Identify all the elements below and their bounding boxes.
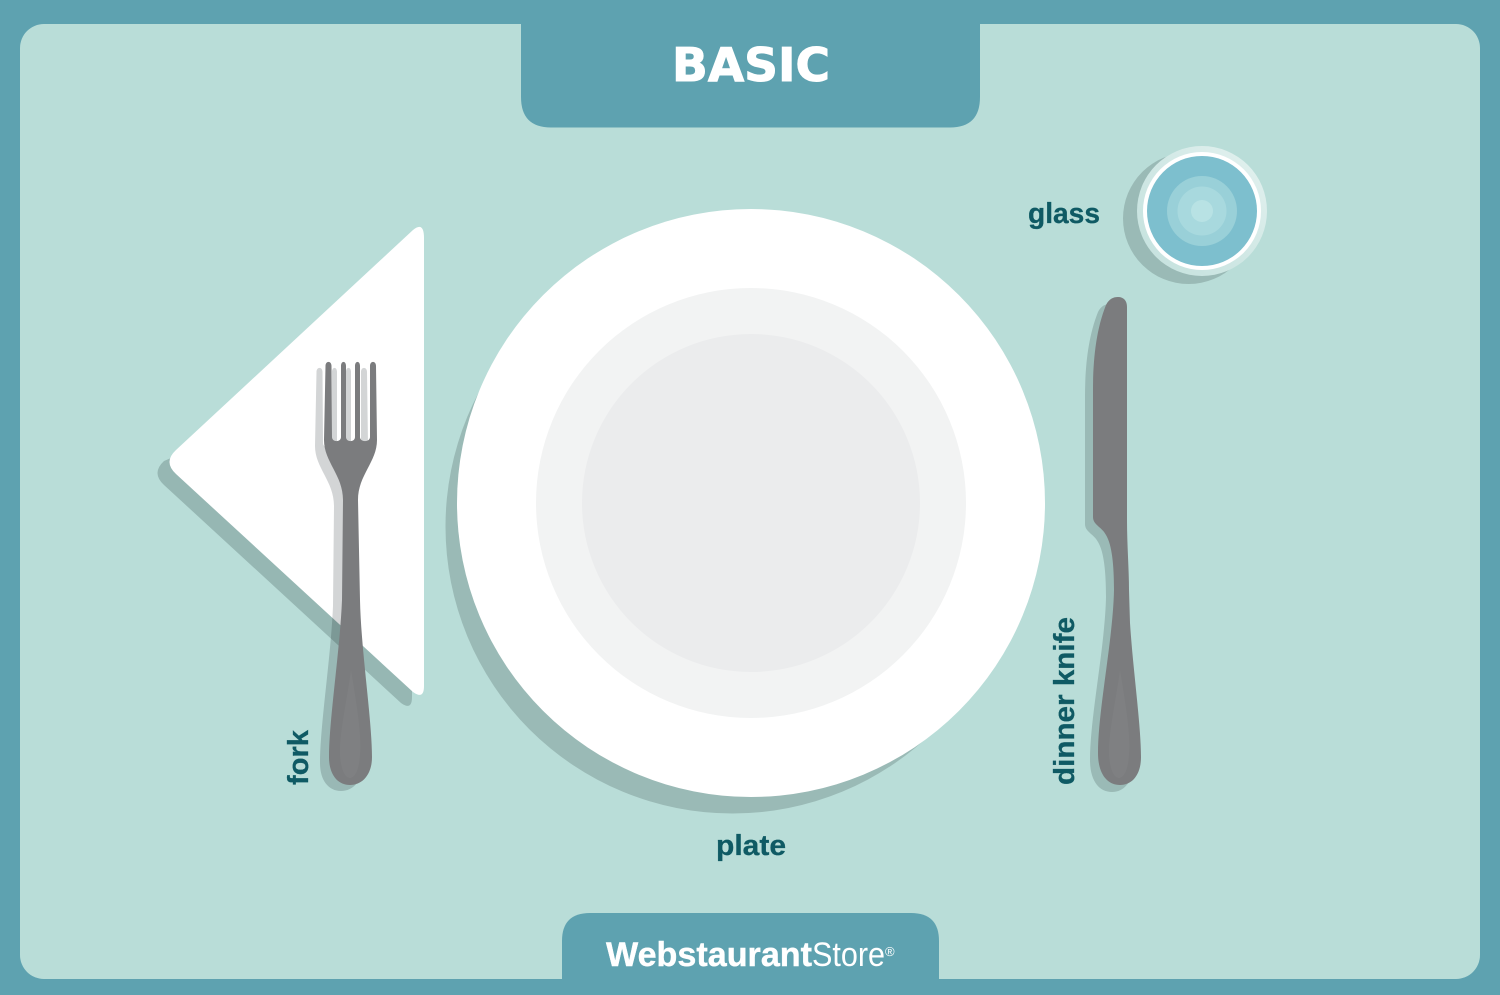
label: fork: fork [283,729,315,785]
glass [1123,146,1267,284]
logo wordmark light: Store [812,936,885,974]
plate shadow [446,240,1020,814]
fork handle highlight [340,670,360,778]
glass outer rim [1137,146,1267,276]
label: plate: plate [716,830,786,862]
napkin shadow [158,450,412,706]
knife shadow [1085,304,1133,792]
napkin [158,227,424,706]
label: dinner knife: dinner knife [1049,617,1081,785]
napkin triangle [170,227,424,695]
top title tab [521,20,980,128]
fork [315,362,377,791]
plate [446,209,1045,814]
plate rim [457,209,1045,797]
fork shadow [315,368,368,791]
bottom logo tab [562,913,939,983]
knife body [1093,297,1141,785]
knife handle highlight [1109,670,1129,778]
glass shadow [1123,153,1254,284]
label: glass: glass [1028,198,1100,230]
plate well [582,334,920,672]
fork body [324,362,377,785]
dinner knife [1085,297,1141,792]
title: BASIC [672,38,830,92]
logo registered mark: ® [885,944,895,959]
glass white ring [1143,152,1261,270]
plate inner ring [536,288,966,718]
glass water [1147,156,1257,266]
logo wordmark bold: Webstaurant [606,936,812,974]
